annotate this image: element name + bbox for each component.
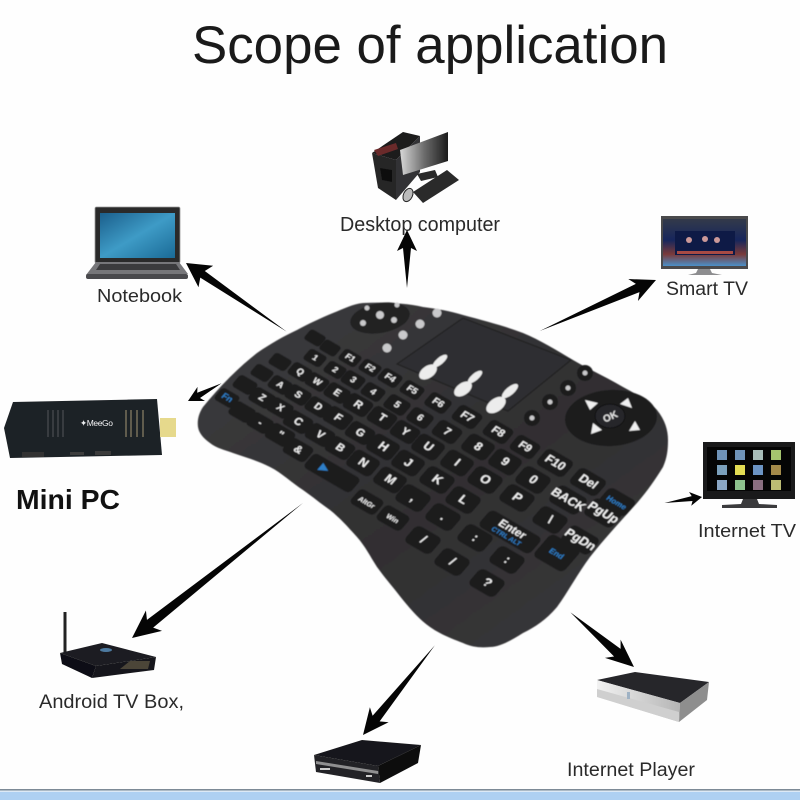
QWERTY row: U xyxy=(420,439,437,454)
ZXCV row: End xyxy=(547,547,566,561)
keyboard body xyxy=(198,303,668,647)
number row: 2 xyxy=(330,365,340,375)
ASDF row: S xyxy=(291,389,305,401)
number row: 6 xyxy=(414,413,426,424)
number row: 5 xyxy=(391,400,403,411)
function row: F2 xyxy=(363,362,378,374)
number row: 0 xyxy=(526,473,541,487)
label: Desktop computer: Desktop computer xyxy=(340,214,500,236)
ZXCV row xyxy=(213,386,582,573)
number row: BACK xyxy=(548,485,589,514)
QWERTY row: P xyxy=(509,490,526,505)
function row xyxy=(303,328,637,518)
ASDF row: H xyxy=(375,439,392,454)
title: Scope of application xyxy=(192,16,668,75)
function row: F10 xyxy=(542,452,569,473)
label: Internet Player: Internet Player xyxy=(567,760,696,781)
arrow: to Android TV box xyxy=(124,493,311,648)
icon: smart TV xyxy=(661,216,748,275)
icon: Android TV box xyxy=(60,612,156,678)
function row: F5 xyxy=(405,383,420,396)
label: Smart TV: Smart TV xyxy=(666,279,748,300)
function row: F6 xyxy=(429,396,447,410)
ZXCV row: V xyxy=(313,429,328,442)
icon: Mini PC stick: ✦MeeGo xyxy=(80,418,113,428)
number row: 3 xyxy=(348,375,359,385)
function row: F8 xyxy=(489,424,507,440)
touchpad xyxy=(397,318,571,411)
icon: internet TV xyxy=(703,442,795,508)
ZXCV row: N xyxy=(355,455,372,470)
vents xyxy=(48,410,143,437)
ZXCV row: . xyxy=(437,510,449,523)
function row: Home xyxy=(604,494,629,512)
QWERTY row: I xyxy=(451,456,463,469)
arrow: to smart TV xyxy=(535,269,661,342)
number row: 1 xyxy=(310,353,320,363)
QWERTY row: O xyxy=(477,472,494,487)
keyboard xyxy=(198,298,668,647)
ZXCV row: Fn xyxy=(219,391,235,404)
ZXCV row: : xyxy=(469,531,482,544)
bottom row: ? xyxy=(479,575,495,590)
ASDF row: G xyxy=(352,426,368,440)
icon: notebook xyxy=(86,207,188,279)
QWERTY row: E xyxy=(330,387,344,399)
bottom row: AltGr xyxy=(356,496,376,510)
ASDF row: Enter xyxy=(495,518,529,542)
ZXCV row: X xyxy=(273,402,287,414)
ASDF row: J xyxy=(401,455,416,469)
QWERTY row: Q xyxy=(294,366,307,377)
ASDF row xyxy=(231,374,543,555)
ZXCV row: C xyxy=(291,415,305,429)
bottom row: : xyxy=(501,553,514,566)
arrow: to Mini PC xyxy=(184,376,225,408)
icon: Mini PC stick xyxy=(4,399,176,458)
arrow: to set-top player xyxy=(354,638,444,743)
ASDF row: CTRL ALT xyxy=(489,526,523,548)
bottom row: Win xyxy=(384,513,400,525)
QWERTY row: \ xyxy=(544,513,557,526)
ASDF row: F xyxy=(331,412,345,424)
right-side round buttons xyxy=(524,365,593,426)
bottom row: - xyxy=(255,418,265,428)
keys xyxy=(213,328,637,599)
number row xyxy=(302,348,625,530)
number row: 9 xyxy=(498,454,513,469)
bottom row: / xyxy=(446,555,459,568)
top-left d-pad and round buttons xyxy=(348,298,442,352)
icon: set-top player xyxy=(314,740,421,783)
label: Mini PC: Mini PC xyxy=(16,484,120,515)
OK d-pad xyxy=(564,388,658,448)
function row: Del xyxy=(576,471,601,492)
ASDF row: K xyxy=(429,472,446,487)
QWERTY row: R xyxy=(351,398,365,412)
OK d-pad: OK xyxy=(602,409,620,426)
QWERTY row: PgDn xyxy=(562,526,599,553)
arrow: to notebook xyxy=(179,252,294,342)
touchpad mouse icons xyxy=(416,353,520,417)
ZXCV row: B xyxy=(333,441,347,455)
arrow: to desktop computer xyxy=(397,230,417,288)
label: Android TV Box: Android TV Box, xyxy=(39,692,184,713)
bottom row: & xyxy=(291,443,305,457)
QWERTY row: W xyxy=(310,376,325,388)
QWERTY row: T xyxy=(375,412,389,424)
number row: PgUp xyxy=(585,499,622,526)
bottom row: ▶ xyxy=(316,461,332,475)
ASDF row: L xyxy=(455,492,472,507)
QWERTY row: Y xyxy=(398,426,413,439)
function row: F9 xyxy=(516,439,534,455)
bottom window bar xyxy=(0,789,800,800)
arrow: to internet player xyxy=(562,603,642,676)
ZXCV row: , xyxy=(407,491,419,504)
bottom row: " xyxy=(274,429,286,441)
ZXCV row: M xyxy=(382,472,399,487)
number row: 8 xyxy=(471,439,486,454)
number row: 4 xyxy=(368,387,379,397)
ASDF row: A xyxy=(274,379,287,390)
arrow: to internet TV xyxy=(663,490,703,510)
function row: F7 xyxy=(458,409,476,425)
ZXCV row: Z xyxy=(256,392,268,404)
QWERTY row xyxy=(249,352,601,556)
bottom row xyxy=(227,400,527,599)
label: Internet TV: Internet TV xyxy=(698,520,797,541)
ASDF row: D xyxy=(311,401,325,413)
icon: internet player xyxy=(597,672,709,722)
bottom row: / xyxy=(417,533,430,546)
label: Notebook: Notebook xyxy=(97,285,183,306)
number row: 7 xyxy=(440,426,454,438)
icon: desktop computer xyxy=(372,132,459,203)
function row: F4 xyxy=(383,371,398,384)
function row: F1 xyxy=(343,352,358,364)
